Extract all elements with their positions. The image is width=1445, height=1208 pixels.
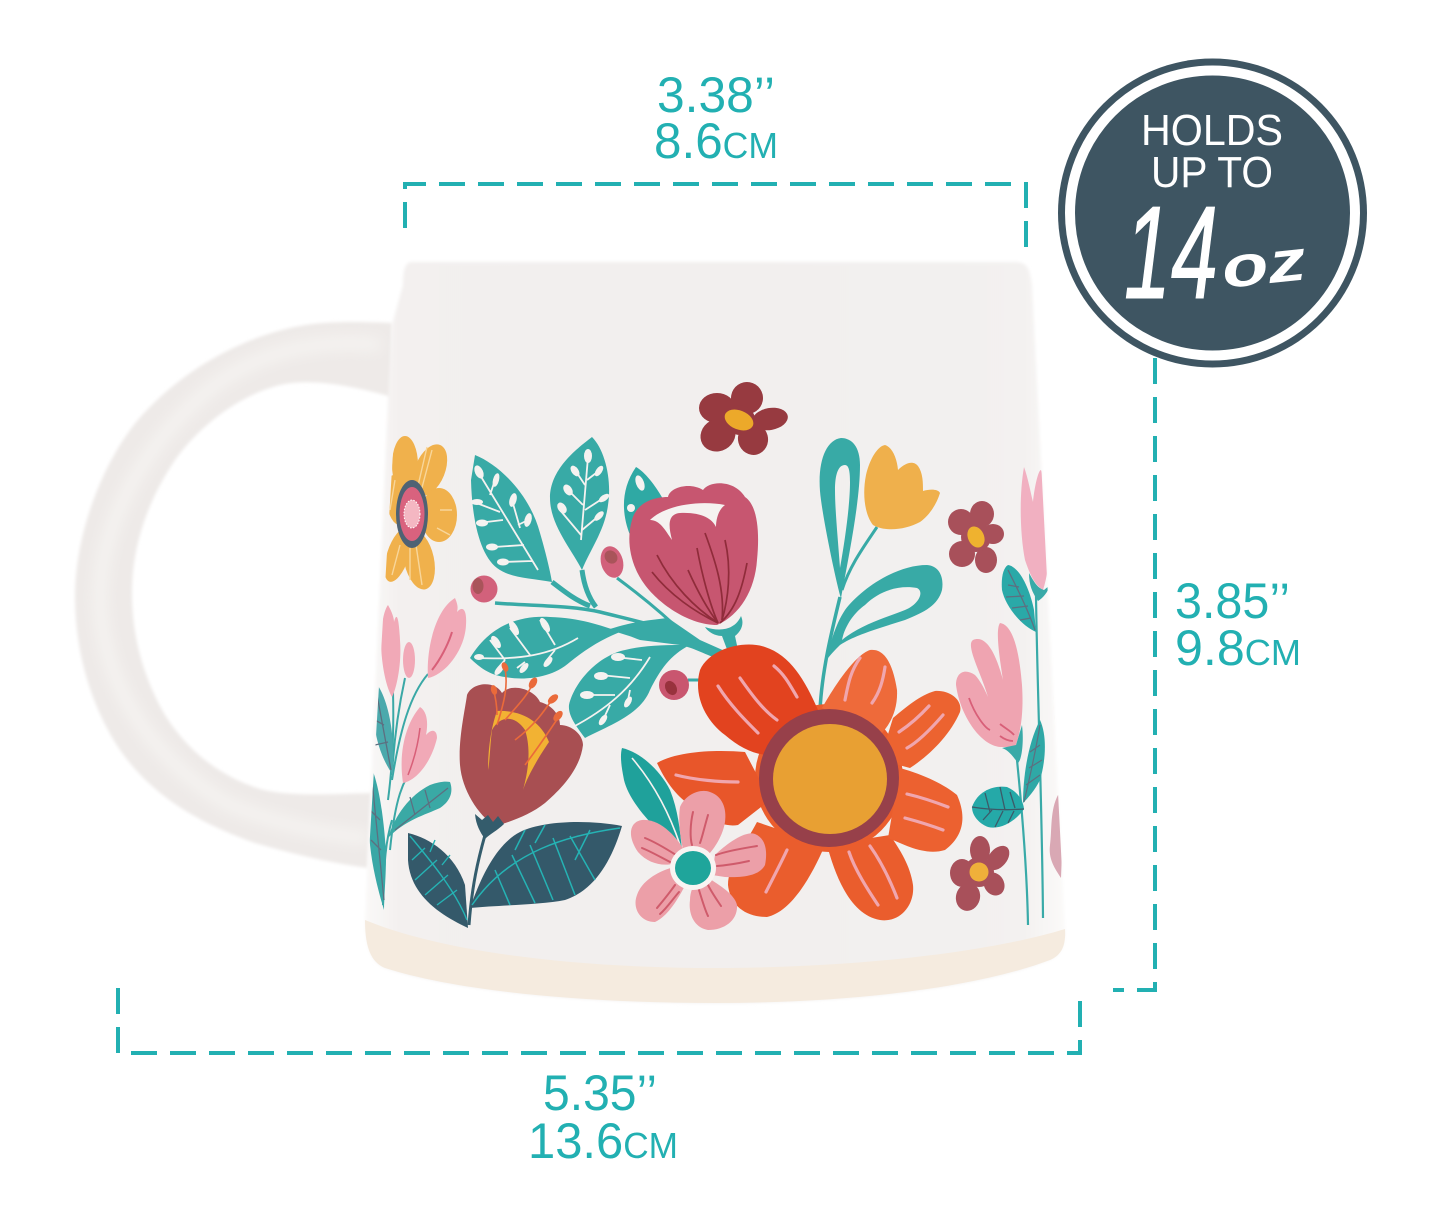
leaf upright [1023,720,1045,803]
bottom dimension label: 5.35’’ [543,1065,657,1121]
left pink buds with stems [368,598,466,910]
pink five-petal flower [631,791,766,930]
capacity badge: UP TO [1151,148,1273,197]
mug handle [75,322,392,868]
bottom dimension line [118,988,1080,1053]
capacity badge: oz [1219,228,1309,301]
bottom dimension label: 13.6CM [528,1113,678,1169]
maroon flower lower-right [950,836,1010,911]
top dimension label [654,67,778,169]
berries [470,544,689,700]
leaf horizontal [972,787,1024,828]
right dimension line [1113,358,1155,990]
orange daisy [657,645,962,920]
capacity badge: 14 [1124,179,1218,326]
rust flower with dark leaves [408,661,622,928]
mug body [365,262,1065,1003]
branch leaf top-left [471,455,552,582]
unglazed base band [365,920,1065,1003]
branch junction [610,618,722,656]
bottom dimension label [528,1065,678,1169]
top dimension label: 3.38’’ [657,67,775,123]
floral pattern [368,379,1064,930]
maroon flower right [948,501,1004,573]
teal leaf behind pink flower [621,748,682,850]
top dimension line [405,184,1026,250]
branch leaf top [550,437,609,570]
crimson tulip [629,483,758,652]
teal looped leaves with yellow tulip [820,438,942,710]
yellow daisy [386,436,457,590]
dark leaf small [408,833,468,928]
right pink tall tulip [1002,467,1050,918]
teal branch with stems [470,437,727,738]
far-right wrapped flowers [1050,795,1062,878]
capacity badge [1058,58,1367,368]
right dimension label: 9.8CM [1175,620,1301,676]
small teal leaves [368,683,451,910]
right pink large tulip [956,623,1045,925]
top dimension label: 8.6CM [654,113,778,169]
right dimension label [1175,573,1301,676]
branch leaf lower-left [470,617,620,678]
capacity badge: HOLDS [1141,106,1283,155]
top maroon flower [699,382,788,455]
branch leaf behind tulip [624,467,663,535]
dark leaf large [470,822,622,908]
branch leaf lower-right [569,645,690,738]
right dimension label: 3.85’’ [1175,573,1290,629]
